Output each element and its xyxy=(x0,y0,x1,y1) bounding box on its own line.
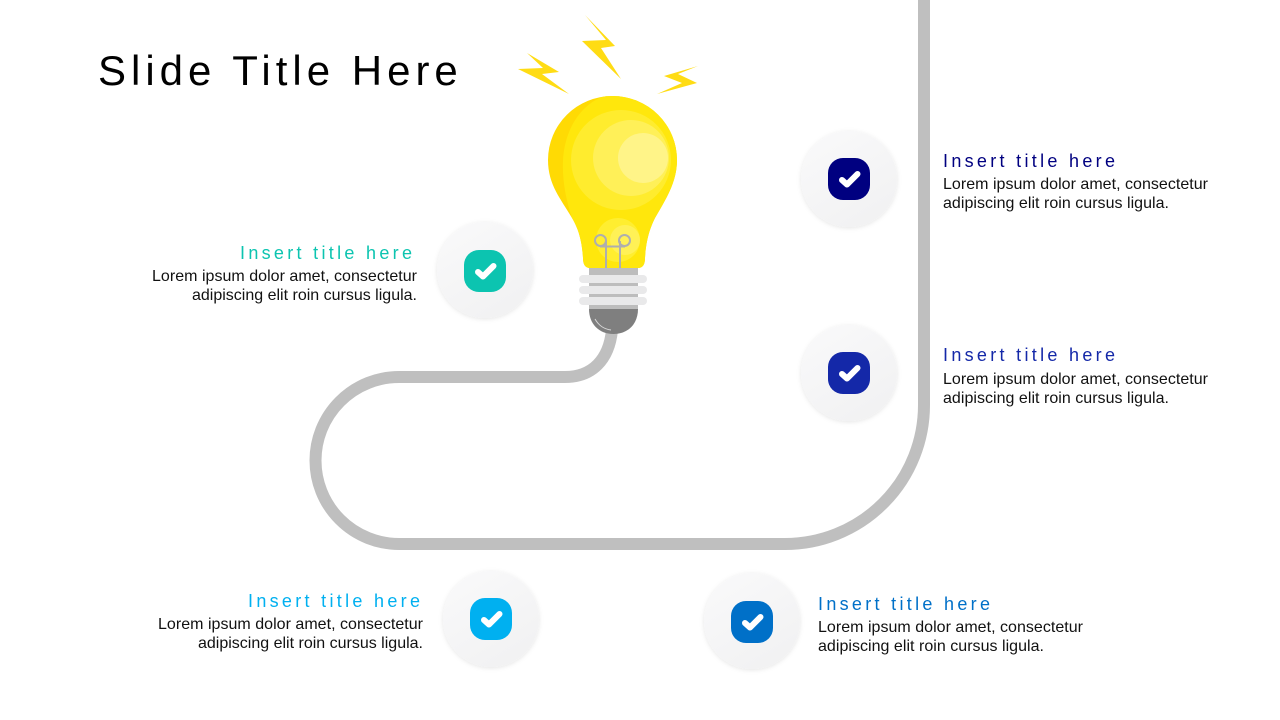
text block: adipiscing elit roin cursus ligula. xyxy=(943,390,1169,407)
icon: check badge teal xyxy=(437,222,533,318)
text block: Insert title here xyxy=(818,594,990,614)
text block xyxy=(158,591,424,652)
icon: check badge cyan xyxy=(443,571,539,667)
item: bottom right xyxy=(704,573,1084,669)
item: left teal xyxy=(152,222,533,318)
bulb screw base xyxy=(579,268,647,334)
text block: Insert title here xyxy=(248,591,420,611)
text block xyxy=(152,243,418,304)
title: Slide Title Here xyxy=(98,47,463,94)
text block xyxy=(818,594,1084,655)
text block: adipiscing elit roin cursus ligula. xyxy=(192,287,417,304)
icon: lightning bolts xyxy=(518,15,698,94)
icon: check badge navy xyxy=(801,131,897,227)
icon: light bulb xyxy=(548,96,677,334)
text block: Insert title here xyxy=(943,151,1115,171)
item: top right xyxy=(801,131,1209,227)
filament xyxy=(595,235,630,269)
icon: check badge mid blue xyxy=(704,573,800,669)
text block: Lorem ipsum dolor amet, consectetur xyxy=(818,619,1084,636)
item: middle right xyxy=(801,325,1209,421)
text block xyxy=(943,151,1209,212)
text block: Insert title here xyxy=(240,243,412,263)
text block: Lorem ipsum dolor amet, consectetur xyxy=(152,268,418,285)
cable from bulb xyxy=(316,0,924,544)
text block: adipiscing elit roin cursus ligula. xyxy=(943,195,1169,212)
text block: adipiscing elit roin cursus ligula. xyxy=(818,638,1044,655)
text block xyxy=(943,345,1209,407)
text block: Lorem ipsum dolor amet, consectetur xyxy=(943,176,1209,193)
icon: check badge blue xyxy=(801,325,897,421)
text block: adipiscing elit roin cursus ligula. xyxy=(198,635,423,652)
item: bottom left xyxy=(158,571,539,667)
text block: Insert title here xyxy=(943,345,1115,365)
text block: Lorem ipsum dolor amet, consectetur xyxy=(158,616,424,633)
text block: Lorem ipsum dolor amet, consectetur xyxy=(943,371,1209,388)
